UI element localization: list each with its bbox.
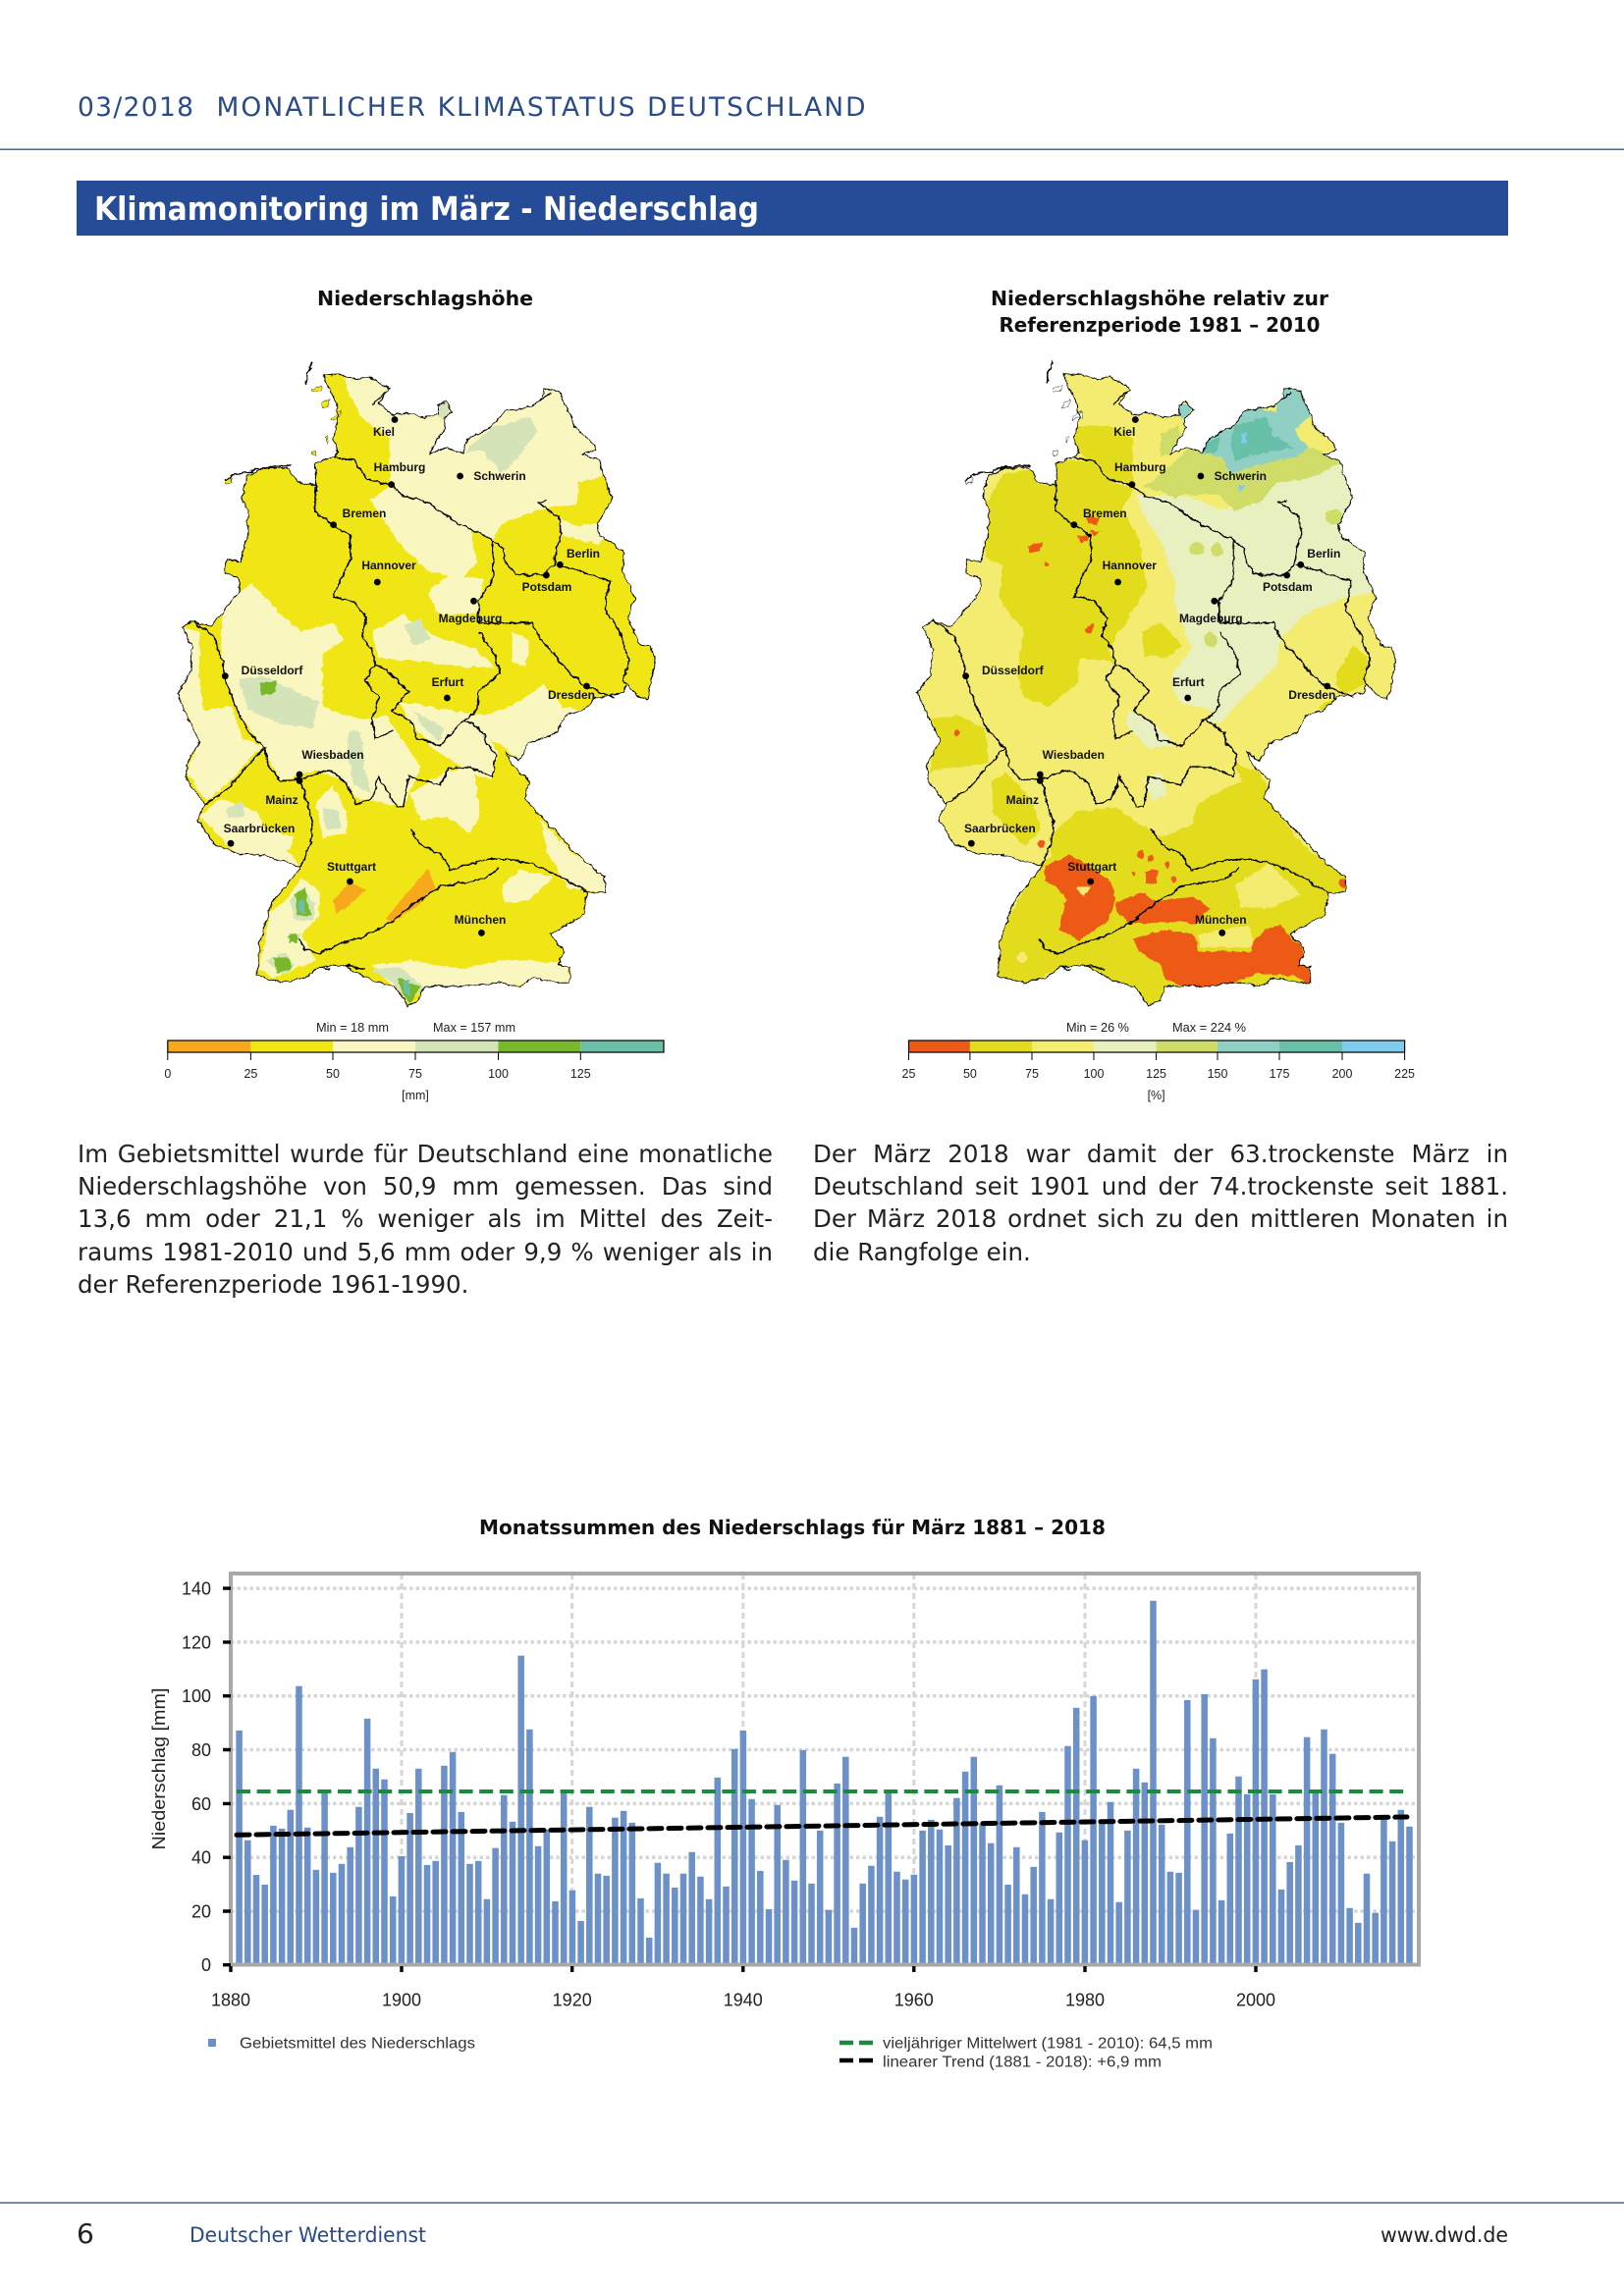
- legend: precipitation height: Max = 157 mm: [433, 1021, 515, 1035]
- bars: [236, 1601, 1413, 1963]
- panel: map relative precipitation: Stuttgart: [1067, 860, 1116, 874]
- legend: relative precipitation: [%]: [1148, 1089, 1165, 1102]
- legend: relative precipitation: 25: [902, 1067, 915, 1081]
- left map heading: Niederschlagshöhe: [317, 287, 533, 310]
- right map heading: Niederschlagshöhe relativ zur: [991, 287, 1329, 310]
- y axis labels: 40: [191, 1848, 211, 1868]
- text block right: Deutschland seit 1901 und der 74.trockenste seit 1881.: [813, 1172, 1508, 1201]
- chart title: Monatssummen des Niederschlags für März 1881 – 2018: [479, 1516, 1106, 1539]
- header line text: 03/2018: [78, 92, 193, 123]
- panel: map precipitation height: Düsseldorf: [242, 664, 303, 677]
- text block left: raums 1981-2010 und 5,6 mm oder 9,9 % weniger als in: [78, 1238, 773, 1266]
- panel: map relative precipitation: Potsdam: [1263, 580, 1313, 594]
- legend: precipitation height: 100: [488, 1067, 509, 1081]
- panel: map precipitation height: Schwerin: [473, 469, 526, 483]
- x axis labels: 1960: [894, 1991, 934, 2010]
- panel: map precipitation height: Berlin: [567, 547, 600, 561]
- legend: relative precipitation: Min = 26 %: [1066, 1021, 1129, 1035]
- panel: map relative precipitation: Hamburg: [1114, 460, 1166, 474]
- panel: map precipitation height: Potsdam: [522, 580, 571, 594]
- legend: relative precipitation: 75: [1025, 1067, 1039, 1081]
- panel: map precipitation height: Saarbrücken: [224, 822, 295, 835]
- legend: precipitation height: 25: [244, 1067, 257, 1081]
- panel: map relative precipitation: Dresden: [1288, 688, 1335, 702]
- x axis labels: 1920: [553, 1991, 592, 2010]
- panel: map precipitation height: Stuttgart: [327, 860, 376, 874]
- y axis title: Niederschlag [mm]: [149, 1688, 169, 1849]
- right map heading: Referenzperiode 1981 – 2010: [1000, 313, 1320, 337]
- x axis labels: 1880: [211, 1991, 250, 2010]
- axis ticks: [223, 1588, 1256, 1972]
- panel: map precipitation height: Erfurt: [432, 675, 463, 689]
- panel: map relative precipitation: Mainz: [1006, 793, 1039, 807]
- panel: map relative precipitation: Düsseldorf: [982, 664, 1045, 677]
- footer page number: 6: [77, 2217, 94, 2250]
- footer organisation: Deutscher Wetterdienst: [189, 2223, 426, 2248]
- text block left: [78, 1140, 773, 1299]
- header line text: MONATLICHER KLIMASTATUS DEUTSCHLAND: [216, 92, 866, 123]
- panel: map precipitation height: Kiel: [373, 425, 395, 439]
- legend: relative precipitation: 125: [1146, 1067, 1166, 1081]
- panel: map precipitation height: München: [455, 913, 506, 927]
- bar chart: monthly precipitation 1881-2018: [149, 1574, 1419, 2010]
- chart legend: bars: Gebietsmittel des Niederschlags: [240, 2036, 475, 2052]
- panel: map relative precipitation: Kiel: [1113, 425, 1135, 439]
- chart legend: lines: linearer Trend (1881 - 2018): +6,9 mm: [883, 2054, 1162, 2071]
- x axis labels: 1900: [382, 1991, 421, 2010]
- panel: map relative precipitation: Bremen: [1083, 507, 1127, 520]
- legend: precipitation height: [164, 1021, 664, 1102]
- chart legend: lines: [839, 2036, 1213, 2071]
- y axis labels: 120: [182, 1632, 211, 1652]
- text block right: [813, 1140, 1508, 1266]
- legend: precipitation height: 125: [570, 1067, 591, 1081]
- y axis labels: 20: [191, 1901, 211, 1921]
- panel: map relative precipitation: Magdeburg: [1179, 612, 1243, 625]
- legend: relative precipitation: 200: [1332, 1067, 1352, 1081]
- text block right: Der März 2018 ordnet sich zu den mittleren Monaten in: [813, 1204, 1508, 1233]
- legend: relative precipitation: 50: [963, 1067, 977, 1081]
- right map heading: [991, 287, 1329, 337]
- y axis labels: 80: [191, 1740, 211, 1760]
- panel: map relative precipitation: Hannover: [1103, 559, 1157, 572]
- x axis labels: 1940: [724, 1991, 763, 2010]
- text block left: 13,6 mm oder 21,1 % weniger als im Mittel des Zeit-: [78, 1204, 773, 1233]
- title banner: [77, 181, 1508, 236]
- panel: map relative precipitation: München: [1195, 913, 1247, 927]
- legend: precipitation height: [mm]: [402, 1089, 429, 1102]
- panel: map precipitation height: Magdeburg: [439, 612, 502, 625]
- y axis labels: 60: [191, 1794, 211, 1814]
- mean line: [237, 1789, 1407, 1793]
- panel: map relative precipitation: Wiesbaden: [1043, 748, 1105, 762]
- y axis labels: [182, 1578, 211, 1975]
- y axis labels: 0: [201, 1955, 211, 1975]
- text block right: die Rangfolge ein.: [813, 1238, 1031, 1266]
- panel: map precipitation height: Mainz: [265, 793, 298, 807]
- chart grid: [231, 1574, 1419, 1963]
- trend line: [237, 1817, 1407, 1835]
- x axis labels: 1980: [1065, 1991, 1105, 2010]
- x axis labels: 2000: [1236, 1991, 1275, 2010]
- text block right: Der März 2018 war damit der 63.trockenste März in: [813, 1140, 1508, 1168]
- legend: precipitation height: Min = 18 mm: [316, 1021, 389, 1035]
- y axis labels: 140: [182, 1578, 211, 1598]
- chart frame: [231, 1574, 1419, 1965]
- legend: relative precipitation: 175: [1270, 1067, 1289, 1081]
- panel: map precipitation height: Wiesbaden: [301, 748, 364, 762]
- panel: map precipitation height: Hannover: [361, 559, 416, 572]
- chart legend: lines: vieljähriger Mittelwert (1981 - 2010): 64,5 mm: [883, 2036, 1213, 2052]
- panel: map precipitation height: Bremen: [343, 507, 386, 520]
- text block left: Im Gebietsmittel wurde für Deutschland eine monatliche: [78, 1140, 773, 1168]
- legend: precipitation height: 0: [164, 1067, 171, 1081]
- legend: precipitation height: 50: [326, 1067, 340, 1081]
- legend: relative precipitation: 100: [1084, 1067, 1104, 1081]
- legend: relative precipitation: 150: [1208, 1067, 1227, 1081]
- x axis labels: [211, 1991, 1275, 2010]
- y axis labels: 100: [182, 1686, 211, 1706]
- legend: relative precipitation: 225: [1394, 1067, 1415, 1081]
- panel: map relative precipitation: [915, 359, 1396, 1007]
- panel: map precipitation height: [177, 361, 656, 1007]
- legend: relative precipitation: Max = 224 %: [1172, 1021, 1246, 1035]
- panel: map relative precipitation: Saarbrücken: [964, 822, 1036, 835]
- legend: precipitation height: 75: [408, 1067, 422, 1081]
- panel: map precipitation height: Hamburg: [374, 460, 425, 474]
- panel: map relative precipitation: Schwerin: [1215, 469, 1267, 483]
- panel: map relative precipitation: Berlin: [1307, 547, 1340, 561]
- panel: map relative precipitation: Erfurt: [1172, 675, 1205, 689]
- text block left: der Referenzperiode 1961-1990.: [78, 1270, 468, 1299]
- footer url: www.dwd.de: [1380, 2223, 1508, 2248]
- title banner: Klimamonitoring im März - Niederschlag: [94, 189, 759, 228]
- panel: map precipitation height: Dresden: [548, 688, 595, 702]
- legend: relative precipitation: [902, 1021, 1415, 1102]
- text block left: Niederschlagshöhe von 50,9 mm gemessen. Das sind: [78, 1172, 773, 1201]
